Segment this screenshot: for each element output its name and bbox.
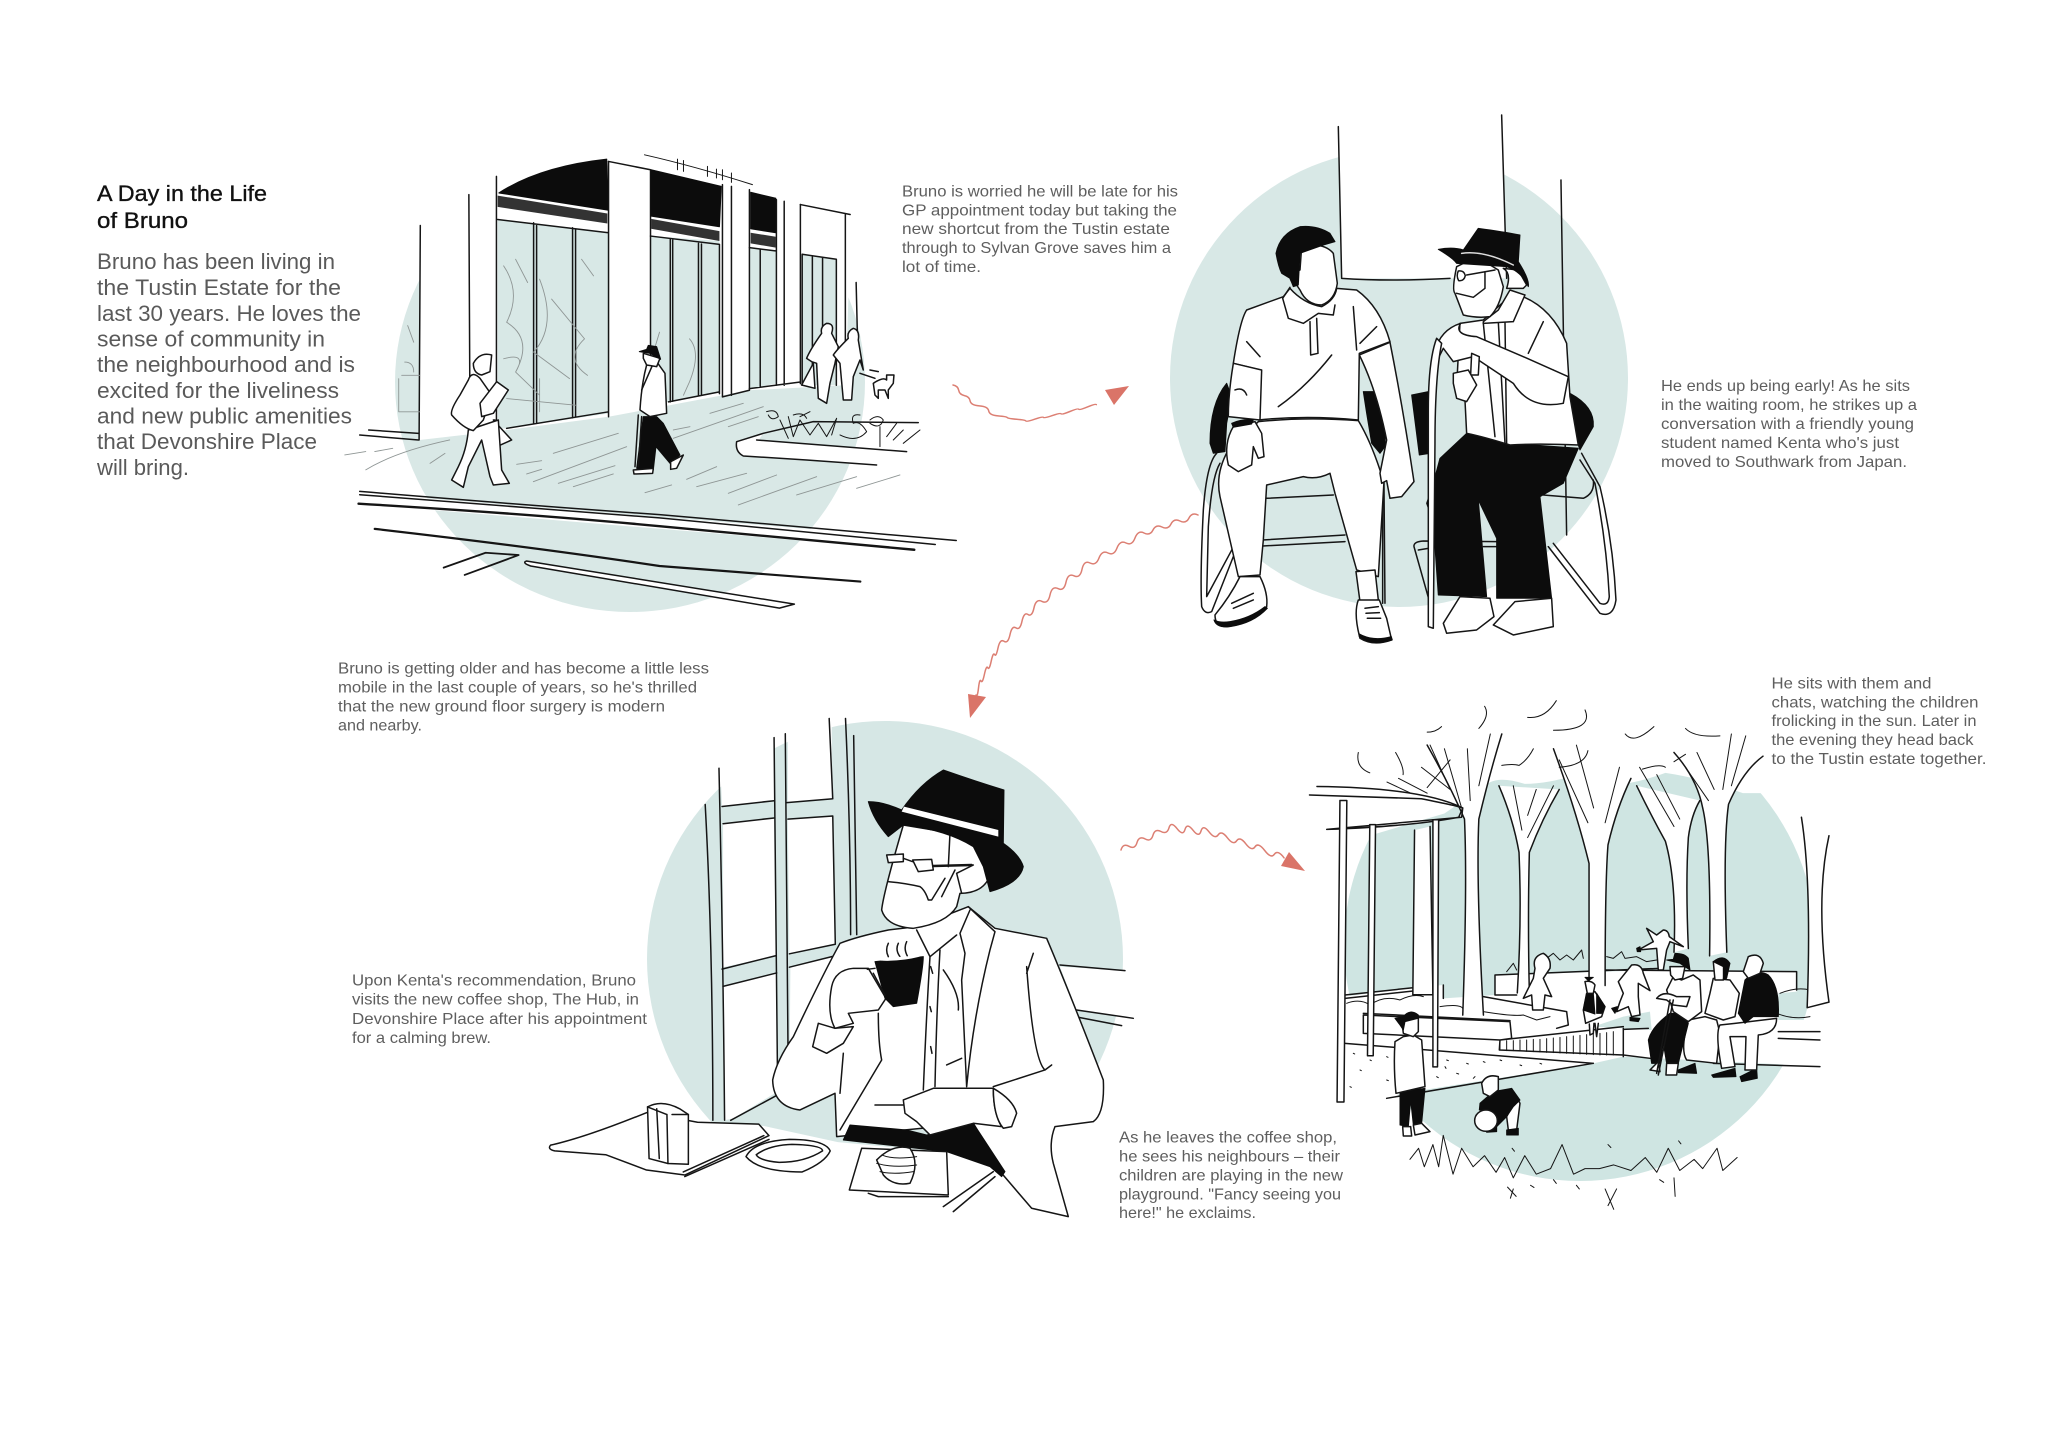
figure: man in black jumper bbox=[1712, 955, 1779, 1082]
intro paragraph: the neighbourhood and is bbox=[97, 352, 355, 377]
figure: girl with bow bbox=[1583, 977, 1605, 1037]
panel: intro text bbox=[96, 181, 361, 480]
caption: shortcut to GP: Bruno is worried he will be late for his bbox=[902, 184, 1178, 200]
plate and croissant bbox=[849, 1147, 995, 1212]
illustration: people, hatching and planter bbox=[430, 323, 920, 505]
figure: crouching toddler with ball bbox=[1475, 1076, 1520, 1135]
caption: sitting with neighbours: the evening they head back bbox=[1772, 732, 1974, 749]
arrow: from scene 1 to scene 2 bbox=[953, 385, 1129, 421]
caption: leaving the coffee shop bbox=[1119, 1130, 1344, 1222]
caption: ground floor surgery bbox=[338, 660, 709, 734]
caption: shortcut to GP: through to Sylvan Grove saves him a bbox=[902, 240, 1171, 257]
caption: ground floor surgery: Bruno is getting older and has become a little less bbox=[338, 660, 709, 678]
backdrop circle bbox=[1170, 149, 1628, 607]
panel: scene 4, park and playground bbox=[1301, 682, 1829, 1209]
caption: leaving the coffee shop: children are playing in the new bbox=[1119, 1168, 1344, 1184]
intro paragraph: and new public amenities bbox=[97, 404, 352, 428]
figure: Bruno seated bbox=[1427, 228, 1578, 635]
grass bbox=[1410, 1135, 1737, 1209]
caption: shortcut to GP: lot of time. bbox=[902, 259, 981, 276]
panel: scene 3, coffee shop bbox=[549, 717, 1133, 1240]
figure: girl running bbox=[1612, 965, 1650, 1022]
backdrop circle bbox=[1344, 709, 1816, 1181]
title: of Bruno bbox=[97, 208, 188, 233]
caption: waiting room: in the waiting room, he strikes up a bbox=[1661, 397, 1917, 414]
figures: couple with dog bbox=[802, 323, 894, 403]
figure: standing child bbox=[1394, 1012, 1430, 1136]
caption: waiting room bbox=[1661, 378, 1917, 471]
intro paragraph: will bring. bbox=[96, 455, 189, 480]
intro paragraph: sense of community in bbox=[97, 326, 325, 352]
caption: shortcut to GP: GP appointment today but taking the bbox=[902, 202, 1177, 220]
illustration: people in the park bbox=[1394, 928, 1779, 1136]
intro paragraph: that Devonshire Place bbox=[97, 429, 317, 454]
intro paragraph: last 30 years. He loves the bbox=[97, 301, 361, 326]
illustration: building bbox=[345, 140, 956, 608]
panel: scene 2, waiting room bbox=[1170, 115, 1628, 643]
intro paragraph bbox=[96, 249, 361, 480]
caption: leaving the coffee shop: As he leaves the coffee shop, bbox=[1119, 1130, 1337, 1146]
figure: Bruno seated in the park bbox=[1648, 953, 1702, 1075]
caption: waiting room: He ends up being early! As he sits bbox=[1661, 378, 1910, 395]
caption: sitting with neighbours: frolicking in the sun. Later in bbox=[1772, 713, 1976, 730]
illustration: Bruno with coffee bbox=[773, 770, 1133, 1217]
caption: sitting with neighbours bbox=[1772, 676, 1986, 768]
panel: scene 1, street walk past the building bbox=[345, 140, 956, 612]
backdrop circle bbox=[395, 152, 865, 612]
illustration: plaza and steps bbox=[1343, 950, 1820, 1100]
caption: shortcut to GP bbox=[902, 184, 1178, 276]
illustration: window and table bbox=[549, 717, 1075, 1240]
figure: child jumping bbox=[1637, 928, 1683, 970]
caption: ground floor surgery: that the new ground floor surgery is modern bbox=[338, 698, 665, 716]
caption: sitting with neighbours: chats, watching the children bbox=[1772, 694, 1978, 712]
caption: ground floor surgery: and nearby. bbox=[338, 718, 422, 734]
figure: Kenta bbox=[1214, 226, 1414, 643]
caption: visit to The Hub: Devonshire Place after his appointment bbox=[352, 1011, 648, 1028]
caption: ground floor surgery: mobile in the last couple of years, so he's thrilled bbox=[338, 680, 697, 696]
intro paragraph: the Tustin Estate for the bbox=[97, 275, 341, 300]
illustration: canopy mask bbox=[1301, 682, 1818, 856]
caption: shortcut to GP: new shortcut from the Tustin estate bbox=[902, 221, 1170, 238]
table items bbox=[549, 1103, 830, 1177]
caption: visit to The Hub: for a calming brew. bbox=[352, 1030, 491, 1047]
pergola bbox=[1310, 787, 1463, 1102]
figure: girl with backpack bbox=[1523, 953, 1552, 1010]
figure: woman walking with bags bbox=[451, 354, 512, 487]
illustration: Bruno and Kenta seated bbox=[1201, 115, 1616, 643]
figure: Bruno walking bbox=[633, 345, 683, 474]
caption: waiting room: student named Kenta who's just bbox=[1661, 435, 1900, 452]
title bbox=[97, 181, 267, 233]
backdrop circle bbox=[647, 721, 1123, 1197]
caption: visit to The Hub bbox=[352, 972, 648, 1047]
caption: leaving the coffee shop: here!" he exclaims. bbox=[1119, 1205, 1256, 1222]
intro paragraph: excited for the liveliness bbox=[97, 378, 339, 403]
planter bbox=[736, 411, 920, 465]
chairs bbox=[1201, 383, 1616, 614]
intro paragraph: Bruno has been living in bbox=[97, 249, 335, 274]
caption: leaving the coffee shop: playground. "Fancy seeing you bbox=[1119, 1186, 1341, 1204]
caption: waiting room: conversation with a friendly young bbox=[1661, 416, 1914, 433]
caption: leaving the coffee shop: he sees his neighbours – their bbox=[1119, 1148, 1340, 1166]
arrow: from scene 3 to scene 4 bbox=[1121, 824, 1305, 871]
caption: visit to The Hub: visits the new coffee shop, The Hub, in bbox=[352, 992, 639, 1008]
title: A Day in the Life bbox=[97, 181, 267, 206]
caption: waiting room: moved to Southwark from Japan. bbox=[1661, 454, 1907, 471]
illustration: trees bbox=[1310, 701, 1829, 1209]
caption: sitting with neighbours: He sits with them and bbox=[1772, 676, 1932, 692]
arrow: from scene 2 to scene 3 bbox=[968, 514, 1198, 718]
caption: sitting with neighbours: to the Tustin estate together. bbox=[1772, 751, 1986, 768]
figure: woman seated bbox=[1678, 958, 1739, 1073]
caption: visit to The Hub: Upon Kenta's recommendation, Bruno bbox=[352, 972, 636, 990]
